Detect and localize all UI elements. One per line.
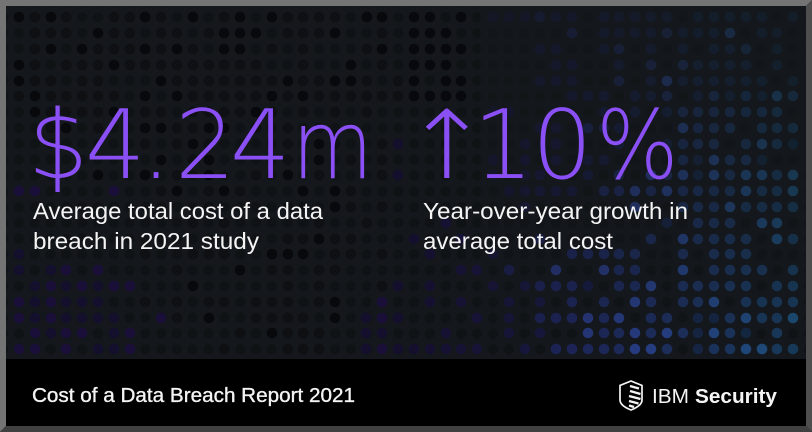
IBM: IBM <box>652 386 689 408</box>
right description text <box>423 198 688 254</box>
dot grid: top fade on right side <box>480 6 806 359</box>
headline stat: up 10% <box>403 90 679 201</box>
logo wordmark <box>652 386 778 408</box>
line 2: average total cost <box>423 228 614 254</box>
unit m: m <box>292 91 373 201</box>
line 1: Year-over-year growth in <box>423 198 688 224</box>
digits: $4.24 <box>28 91 290 201</box>
icon: IBM Security shield <box>620 381 642 410</box>
dot grid: accents <box>19 17 793 349</box>
digits: 10 <box>473 91 592 201</box>
footer title: Cost of a Data Breach Report 2021 <box>32 385 355 407</box>
footer band <box>6 359 806 426</box>
line 1: Average total cost of a data <box>33 198 323 224</box>
arrow glyph: ↑ <box>403 90 491 201</box>
percent sign: % <box>596 90 679 201</box>
Security: Security <box>695 386 778 408</box>
left description text <box>33 198 323 254</box>
line 2: breach in 2021 study <box>33 228 260 254</box>
headline stat: $4.24m <box>28 91 373 201</box>
